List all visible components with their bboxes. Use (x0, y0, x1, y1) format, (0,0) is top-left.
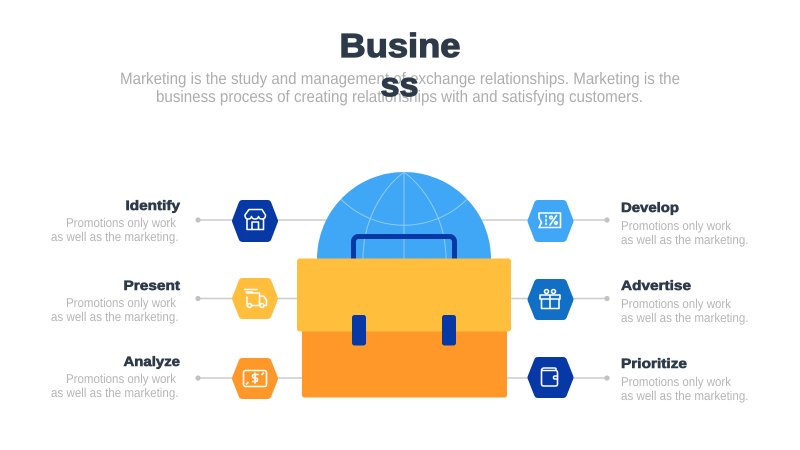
item: Identify: as well as the marketing. (51, 229, 178, 244)
briefcase (297, 236, 511, 398)
item: Identify: Promotions only work (66, 215, 177, 230)
connector lines (195, 217, 610, 381)
briefcase clip right (442, 315, 456, 346)
subtitle: business process of creating relationships with and satisfying customers. (156, 87, 643, 106)
globe (317, 172, 491, 259)
briefcase body (302, 320, 507, 398)
item: Advertise (621, 278, 748, 325)
item: Analyze: Promotions only work (66, 371, 177, 386)
item: Present: Promotions only work (66, 295, 177, 310)
item: Analyze: as well as the marketing. (51, 385, 178, 400)
subtitle: Marketing is the study and management of exchange relationships. Marketing is the (120, 69, 680, 88)
hexagon icon: wallet (532, 361, 570, 394)
title: Busine (340, 28, 460, 65)
item: Develop: Develop (621, 200, 679, 215)
item: Present: Present (124, 278, 181, 293)
item: Develop: as well as the marketing. (621, 232, 748, 247)
item: Identify: Identify (126, 198, 180, 213)
item: Present: as well as the marketing. (51, 309, 178, 324)
hexagon icon: gift (532, 283, 570, 316)
item: Prioritize: Promotions only work (621, 374, 732, 389)
title (340, 28, 460, 104)
hexagon icon: truck (236, 282, 274, 315)
title: ss (380, 67, 418, 104)
briefcase clip left (352, 315, 366, 346)
item: Analyze (51, 354, 180, 400)
item: Identify (51, 198, 180, 244)
item: Prioritize: Prioritize (621, 356, 687, 371)
item: Advertise: Advertise (621, 278, 691, 293)
hexagon icon: coupon (532, 204, 570, 238)
hexagon icon: money (236, 362, 274, 395)
item: Advertise: as well as the marketing. (621, 310, 748, 325)
item: Present (51, 278, 181, 324)
briefcase handle (354, 236, 454, 268)
item: Develop (621, 200, 748, 247)
subtitle (120, 69, 680, 106)
item: Prioritize (621, 356, 748, 403)
item: Advertise: Promotions only work (621, 296, 732, 311)
item: Develop: Promotions only work (621, 218, 732, 233)
item: Prioritize: as well as the marketing. (621, 388, 748, 403)
briefcase flap (297, 258, 511, 332)
hexagon icon: store (236, 204, 274, 238)
item: Analyze: Analyze (124, 354, 180, 369)
